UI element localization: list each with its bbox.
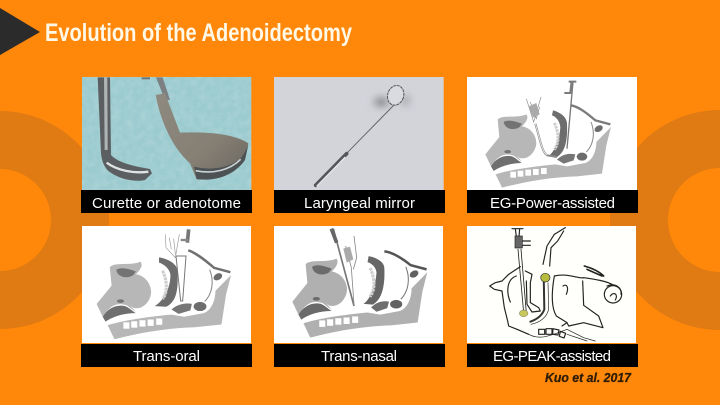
panel: curette or adenotome xyxy=(81,77,252,213)
photo: curette and adenotome xyxy=(82,77,251,190)
caption: EG-PEAK-assisted xyxy=(493,348,611,365)
panel: EG-power-assisted xyxy=(467,77,638,213)
left decorative ring xyxy=(0,111,109,329)
caption bar xyxy=(81,190,252,213)
caption bar xyxy=(274,344,445,367)
panel: trans-nasal xyxy=(274,226,445,367)
diagram: trans-oral xyxy=(82,226,251,343)
caption: Trans-oral xyxy=(133,348,200,365)
caption bar xyxy=(467,344,638,367)
caption bar xyxy=(467,190,638,213)
photo: laryngeal mirror xyxy=(274,77,444,190)
right decorative ring xyxy=(610,110,720,330)
caption: Laryngeal mirror xyxy=(304,195,415,212)
panel: EG-PEAK-assisted xyxy=(467,226,638,367)
caption: Trans-nasal xyxy=(321,348,397,365)
diagram: trans-nasal xyxy=(274,226,443,343)
diagram: EG-power-assisted xyxy=(467,77,637,190)
caption: Curette or adenotome xyxy=(92,195,241,212)
diagram: EG-PEAK-assisted xyxy=(467,226,636,343)
title marker triangle xyxy=(0,8,40,55)
citation: Kuo et al. 2017 xyxy=(545,370,632,385)
panel: laryngeal mirror xyxy=(274,77,445,213)
title: Evolution of the Adenoidectomy xyxy=(45,19,352,47)
caption bar xyxy=(81,344,252,367)
panel: trans-oral xyxy=(81,226,252,367)
caption: EG-Power-assisted xyxy=(490,195,615,212)
caption bar xyxy=(274,190,445,213)
